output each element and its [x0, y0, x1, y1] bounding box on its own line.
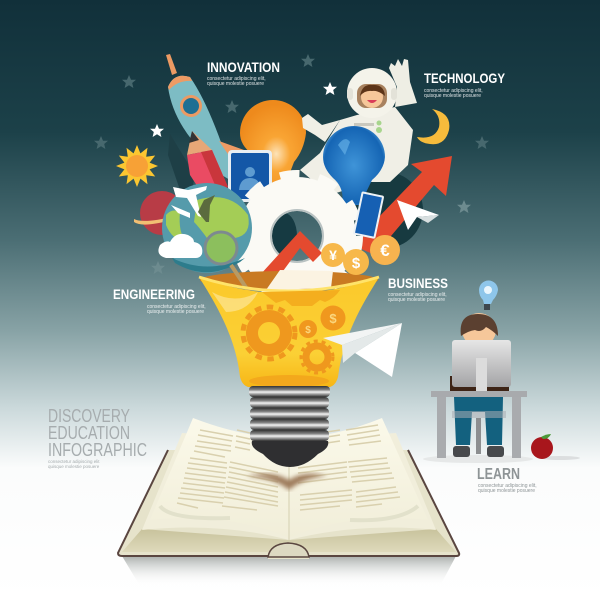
icon: white page in funnel — [266, 270, 333, 290]
title: discovery education infographic: INFOGRAPHIC — [48, 439, 147, 460]
heading: technology: quisque molestie posuere — [424, 93, 481, 99]
icon: astronaut — [300, 59, 417, 195]
heading: technology: consectetur adipiscing elit, — [424, 88, 483, 94]
heading: innovation — [207, 60, 280, 87]
icon: light bulb funnel glass: $ — [305, 325, 311, 336]
icon: red apple — [531, 434, 580, 460]
heading: engineering: quisque molestie posuere — [147, 309, 204, 315]
title: discovery education infographic — [48, 405, 147, 469]
title: discovery education infographic: consectetur adipiscing elit — [48, 459, 100, 464]
icon: magnifying glass — [205, 232, 251, 295]
heading: business: quisque molestie posuere — [388, 297, 445, 303]
icon: smartphone — [353, 191, 384, 239]
icon: dark planet behind arrow — [349, 172, 423, 248]
stars — [94, 54, 489, 274]
heading: engineering — [113, 287, 206, 315]
heading: innovation: consectetur adipiscing elit, — [207, 76, 266, 82]
icon: paper plane lower — [323, 323, 402, 377]
person at desk — [423, 313, 533, 463]
icon: funnel back rim — [200, 271, 378, 289]
icon: red growth arrow — [352, 156, 452, 255]
icon: red planet with ring — [134, 191, 184, 235]
heading: technology — [424, 71, 505, 99]
icon: dark shape seen through gear hole — [271, 213, 297, 259]
icon: dollar coin: $ — [352, 255, 361, 272]
heading: innovation: INNOVATION — [207, 60, 280, 75]
icon: orange light bulb — [240, 100, 306, 183]
icon: blue light bulb — [323, 126, 385, 205]
title: discovery education infographic: EDUCATION — [48, 422, 130, 443]
heading: business — [388, 276, 448, 303]
heading: innovation: quisque molestie posuere — [207, 81, 264, 87]
icon: yen coin: ¥ — [329, 247, 337, 263]
icon: dollar coin — [343, 249, 369, 275]
title: discovery education infographic: DISCOVERY — [48, 405, 130, 426]
icon: euro coin — [370, 235, 400, 265]
heading: engineering: ENGINEERING — [113, 287, 195, 302]
icon: globe — [162, 183, 252, 273]
icon: light bulb funnel glass: $ — [329, 311, 337, 326]
heading: business: BUSINESS — [388, 276, 448, 291]
icon: yen coin — [321, 243, 345, 267]
icon: cloud — [158, 234, 202, 258]
icon: rocket — [166, 54, 245, 180]
heading: technology: TECHNOLOGY — [424, 71, 505, 86]
icon: pencil — [187, 131, 228, 198]
heading: learn — [477, 466, 537, 494]
icon: crescent moon — [417, 109, 449, 144]
icon: light bulb funnel glass — [199, 277, 379, 387]
icon: euro coin: € — [380, 241, 390, 260]
icon: sun — [116, 145, 158, 187]
icon: tablet — [228, 150, 272, 202]
heading: learn: LEARN — [477, 466, 520, 483]
heading: business: consectetur adipiscing elit, — [388, 292, 447, 298]
icon: white gear — [237, 176, 357, 296]
open book — [118, 418, 459, 586]
icon: small glowing idea bulb — [479, 280, 498, 310]
heading: learn: consectetur adipiscing elit, — [478, 483, 537, 489]
icon: arrow bend over gear — [250, 231, 322, 286]
heading: engineering: consectetur adipiscing elit, — [147, 304, 206, 310]
icon: rocket shadow — [168, 134, 195, 190]
title: discovery education infographic: quisque molestie posuere — [48, 464, 100, 469]
icon: paper plane upper — [397, 200, 439, 230]
heading: learn: quisque molestie posuere — [478, 488, 535, 494]
icon: airplanes — [171, 186, 215, 222]
icon: bulb screw base — [249, 386, 330, 467]
